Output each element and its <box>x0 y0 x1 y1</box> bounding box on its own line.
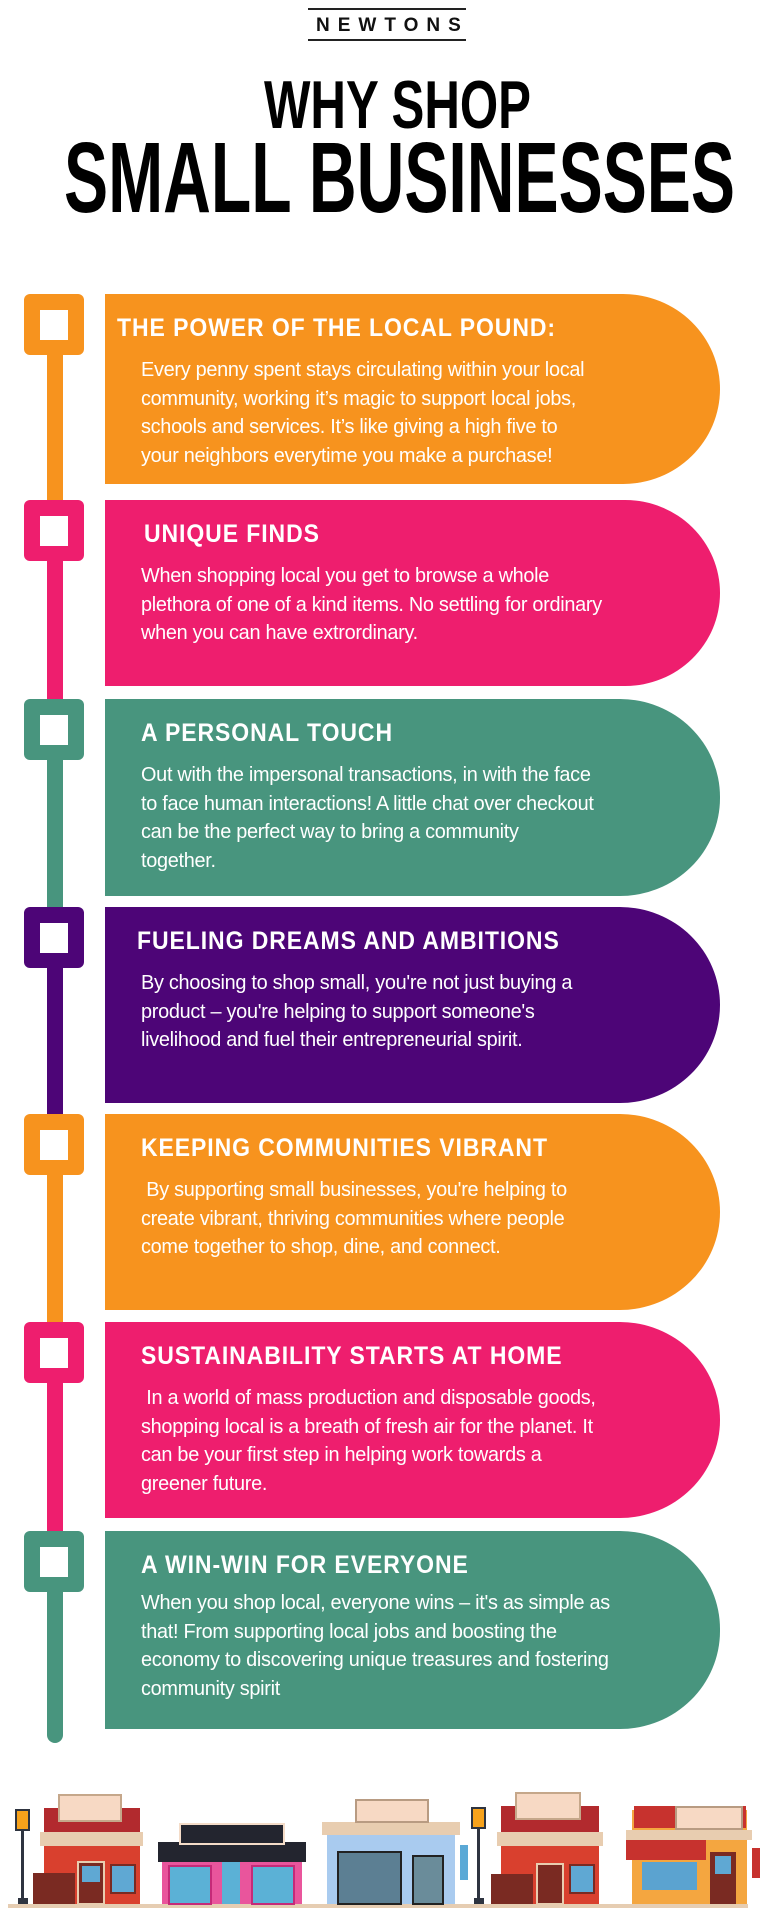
icon 4 <box>24 907 84 968</box>
panel: a personal touch <box>105 699 720 896</box>
shop 5 <box>626 1806 760 1904</box>
panel: win-win <box>105 1531 720 1729</box>
panel: fueling dreams: product – you're helping to support someone's <box>141 1000 535 1022</box>
panel: fueling dreams: FUELING DREAMS AND AMBITIONS <box>137 927 560 955</box>
shop 2 <box>158 1824 306 1904</box>
panel: win-win: A WIN-WIN FOR EVERYONE <box>141 1551 469 1579</box>
icon 3 <box>24 699 84 760</box>
shop 1 <box>33 1795 143 1904</box>
panel: sustainability: can be your first step in helping work towards a <box>141 1443 542 1466</box>
panel: win-win: economy to discovering unique treasures and fostering <box>141 1648 609 1671</box>
panel: the power of the local pound: Every penny spent stays circulating within your local <box>141 358 584 381</box>
timeline stems <box>47 340 63 510</box>
icon 5 <box>24 1114 84 1175</box>
title: WHY SHOP <box>264 67 531 143</box>
panel: the power of the local pound: community, working it’s magic to support local jobs, <box>141 386 576 410</box>
panel: sustainability: SUSTAINABILITY STARTS AT HOME <box>141 1342 563 1370</box>
icon 6 <box>24 1322 84 1383</box>
panel: sustainability <box>105 1322 720 1518</box>
panel: sustainability: In a world of mass production and disposable goods, <box>146 1386 596 1409</box>
panel: the power of the local pound: schools and services. It’s like giving a high five to <box>141 415 557 438</box>
panel: fueling dreams: livelihood and fuel their entrepreneurial spirit. <box>141 1028 522 1051</box>
panel: win-win: community spirit <box>141 1676 280 1700</box>
panel: fueling dreams <box>105 907 720 1103</box>
panel: unique finds: UNIQUE FINDS <box>144 520 320 548</box>
ground <box>8 1904 748 1908</box>
panel: a personal touch: A PERSONAL TOUCH <box>141 719 393 747</box>
panel: the power of the local pound: THE POWER OF THE LOCAL POUND: <box>117 314 556 342</box>
shop 3 <box>322 1800 468 1904</box>
panel: a personal touch: can be the perfect way to bring a community <box>141 820 519 843</box>
panel: a personal touch: to face human interactions! A little chat over checkout <box>141 792 594 814</box>
shop 4 <box>491 1793 603 1904</box>
panel: keeping communities vibrant <box>105 1114 720 1310</box>
panel: keeping communities vibrant: By supporting small businesses, you're helping to <box>146 1178 567 1201</box>
panel: unique finds <box>105 500 720 686</box>
panel: a personal touch: together. <box>141 848 216 872</box>
panel: unique finds: When shopping local you get to browse a whole <box>141 564 549 587</box>
icon 2 <box>24 500 84 561</box>
logo: NEWTONS <box>316 15 469 36</box>
icon 1 <box>24 294 84 355</box>
panel: unique finds: plethora of one of a kind items. No settling for ordinary <box>141 592 602 616</box>
panel: unique finds: when you can have extrordinary. <box>141 621 418 644</box>
panel: the power of the local pound: your neighbors everytime you make a purchase! <box>141 444 552 466</box>
lamp 1 <box>16 1810 29 1904</box>
title <box>64 67 735 220</box>
panel: sustainability: greener future. <box>141 1472 267 1494</box>
panel: a personal touch: Out with the impersonal transactions, in with the face <box>141 763 591 786</box>
lamp 2 <box>472 1808 485 1904</box>
icon 7 <box>24 1531 84 1592</box>
panel: win-win: that! From supporting local jobs and boosting the <box>141 1620 557 1642</box>
illustration: shop fronts <box>8 1792 760 1908</box>
panel: keeping communities vibrant: KEEPING COMMUNITIES VIBRANT <box>141 1134 548 1162</box>
panel: keeping communities vibrant: create vibrant, thriving communities where people <box>141 1206 564 1230</box>
panel: fueling dreams: By choosing to shop small, you're not just buying a <box>141 971 572 994</box>
panel: win-win: When you shop local, everyone wins – it's as simple as <box>141 1591 610 1614</box>
panel: the power of the local pound <box>105 294 720 484</box>
panel: sustainability: shopping local is a breath of fresh air for the planet. It <box>141 1414 593 1438</box>
panel: keeping communities vibrant: come together to shop, dine, and connect. <box>141 1235 501 1258</box>
